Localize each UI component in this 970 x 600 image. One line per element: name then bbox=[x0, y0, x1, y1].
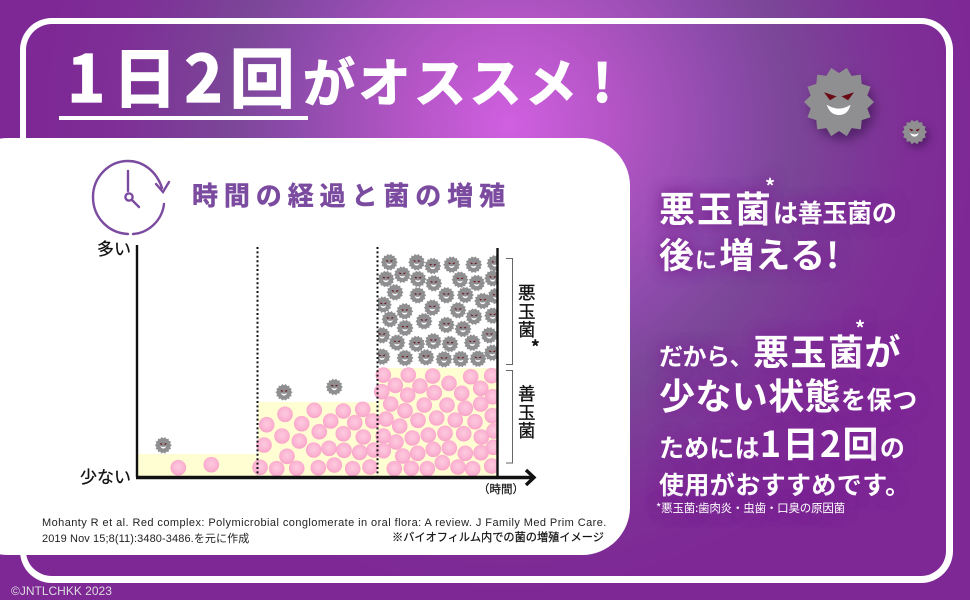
bad bacteria early stages bbox=[155, 379, 343, 454]
label: good bacteria: 善 bbox=[518, 381, 536, 406]
label: bad bacteria: 悪 bbox=[518, 280, 536, 305]
text: bad bacteria increase later: * bbox=[765, 171, 775, 200]
label: bad bacteria: * bbox=[531, 333, 540, 358]
good bacteria pink circles bbox=[170, 367, 502, 477]
label: bad bacteria bbox=[518, 280, 540, 358]
title: 1日2回 bbox=[67, 27, 302, 121]
good bacteria yellow areas bbox=[138, 368, 497, 476]
citation: 2019 Nov 15;8(11):3480-3486.を元に作成 bbox=[42, 532, 249, 544]
heading: time and bacteria growth: 時間の経過と菌の増殖 bbox=[192, 176, 511, 213]
text: twice a day recommendation: ためには1日2回の bbox=[659, 416, 906, 468]
label: bad bacteria: 玉 bbox=[518, 299, 536, 324]
title bbox=[67, 27, 615, 121]
text: twice a day recommendation: 少ない状態を保つ bbox=[659, 368, 918, 420]
text: bad bacteria increase later: 後に増える! bbox=[659, 228, 840, 279]
axis label: time: （時間） bbox=[478, 481, 524, 497]
text: twice a day recommendation: * bbox=[855, 313, 865, 342]
citation bbox=[42, 517, 607, 544]
brackets bbox=[506, 258, 512, 463]
citation: Mohanty R et al. Red complex: Polymicrobial conglomerate in oral flora: A review. J Family Med Prim Care. bbox=[42, 517, 607, 529]
panel: bacterial growth chart bbox=[0, 138, 630, 555]
icon: clock with arrow bbox=[92, 160, 170, 236]
text: bad bacteria increase later: 悪玉菌は善玉菌の bbox=[659, 181, 897, 233]
bad bacteria late stage bbox=[374, 254, 504, 368]
text: twice a day recommendation: 使用がおすすめです。 bbox=[659, 466, 911, 502]
icon: large bad bacterium bbox=[804, 68, 880, 144]
label: good bacteria: 菌 bbox=[518, 418, 536, 443]
label: bad bacteria: 菌 bbox=[518, 317, 536, 342]
text: twice a day recommendation bbox=[656, 313, 918, 502]
text: bad bacteria increase later bbox=[654, 171, 897, 279]
footnote: *悪玉菌:歯肉炎・虫歯・口臭の原因菌 bbox=[656, 500, 845, 516]
label: good bacteria bbox=[518, 381, 536, 443]
title underline bbox=[59, 116, 308, 120]
copyright: ©JNTLCHKK 2023 bbox=[11, 584, 112, 598]
axis label: few: 少ない bbox=[80, 463, 131, 488]
chart axes bbox=[136, 245, 534, 485]
biofilm note: ※バイオフィルム内での菌の増殖イメージ bbox=[392, 529, 604, 545]
axis label: many: 多い bbox=[97, 235, 131, 260]
icon: small bad bacterium bbox=[902, 120, 932, 150]
title: がオススメ! bbox=[303, 42, 615, 117]
bar chart: bacteria growth over time bbox=[136, 245, 536, 486]
label: good bacteria: 玉 bbox=[518, 400, 536, 425]
text: twice a day recommendation: だから、悪玉菌が bbox=[659, 324, 901, 376]
